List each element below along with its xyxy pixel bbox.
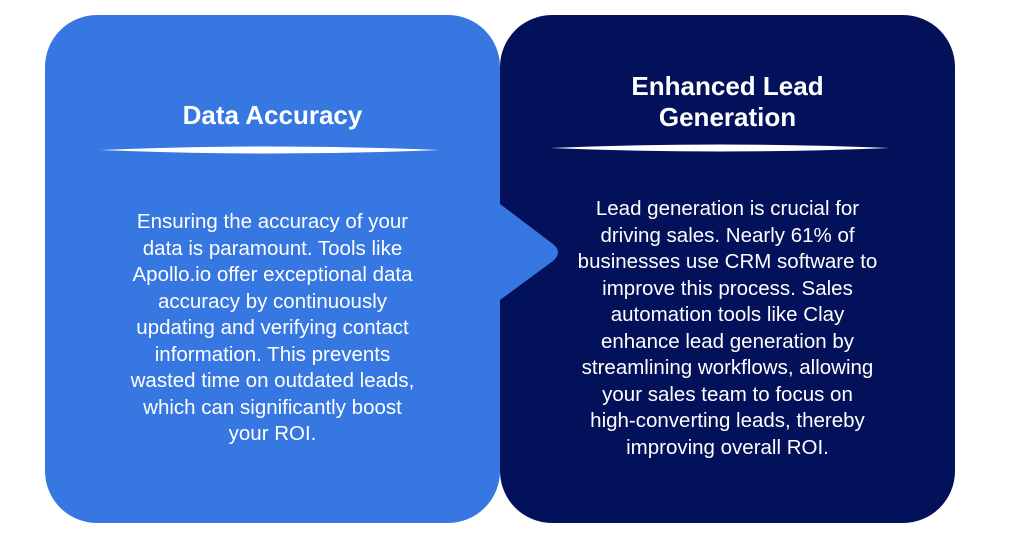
text: data accuracy body: data is paramount. Tools like bbox=[143, 236, 402, 260]
panel: data accuracy bbox=[45, 15, 500, 523]
text: lead generation body: automation tools like Clay bbox=[611, 303, 844, 326]
text: data accuracy body: updating and verifying contact bbox=[136, 316, 409, 339]
text: lead generation body: Lead generation is crucial for bbox=[596, 197, 859, 220]
text: lead generation body: improving overall ROI. bbox=[626, 436, 829, 458]
arrow: pointer into right panel bbox=[500, 204, 558, 300]
heading: enhanced lead generation bbox=[631, 71, 824, 132]
heading: data accuracy: Data Accuracy bbox=[183, 100, 362, 130]
divider bbox=[550, 144, 890, 152]
text: lead generation body bbox=[578, 197, 877, 458]
text: lead generation body: enhance lead generation by bbox=[601, 330, 854, 352]
text: data accuracy body: Ensuring the accuracy of your bbox=[137, 210, 408, 233]
text: lead generation body: improve this process. Sales bbox=[602, 276, 853, 300]
divider bbox=[100, 146, 440, 154]
heading: enhanced lead generation: Generation bbox=[659, 102, 796, 132]
heading: enhanced lead generation: Enhanced Lead bbox=[631, 71, 824, 101]
text: lead generation body: your sales team to focus on bbox=[602, 382, 853, 406]
text: lead generation body: high-converting leads, thereby bbox=[590, 409, 865, 432]
text: data accuracy body: wasted time on outdated leads, bbox=[131, 369, 414, 392]
text: lead generation body: driving sales. Nearly 61% of bbox=[600, 224, 855, 246]
text: data accuracy body: accuracy by continuously bbox=[158, 290, 387, 312]
panel: enhanced lead generation bbox=[500, 15, 955, 523]
text: data accuracy body bbox=[130, 210, 414, 445]
text: data accuracy body: which can significantly boost bbox=[143, 396, 402, 418]
text: data accuracy body: your ROI. bbox=[229, 422, 316, 445]
text: lead generation body: streamlining workflows, allowing bbox=[582, 356, 873, 379]
text: lead generation body: businesses use CRM software to bbox=[578, 250, 877, 273]
text: data accuracy body: Apollo.io offer exceptional data bbox=[132, 263, 412, 286]
text: data accuracy body: information. This prevents bbox=[155, 342, 390, 366]
